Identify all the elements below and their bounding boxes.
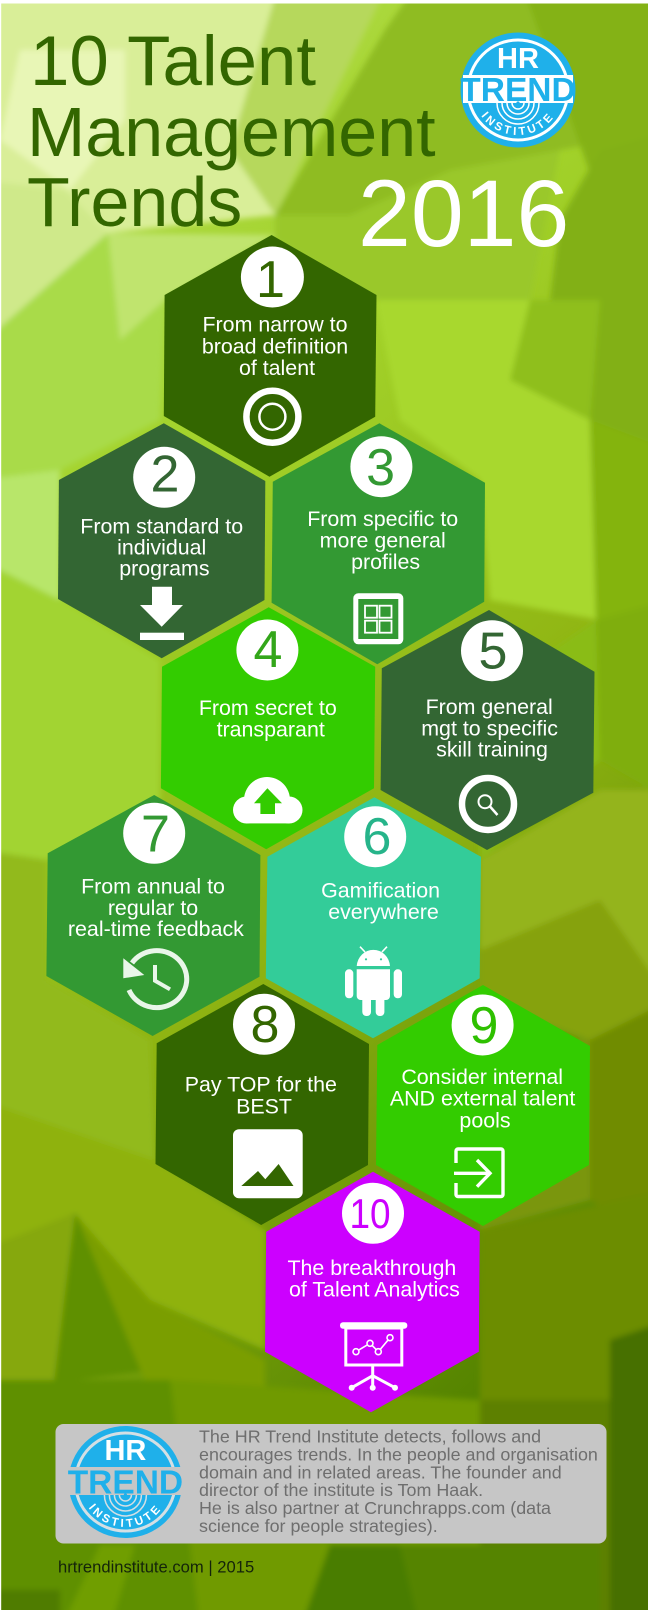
icon: picture [233, 1129, 303, 1198]
icon: target rings [246, 391, 298, 443]
hexagon 6: gamification: Gamification [321, 878, 440, 902]
hexagon 5: general to specific training [381, 610, 594, 850]
title: Trends [27, 163, 242, 241]
hexagon 3: specific to general: profiles [351, 550, 420, 574]
hexagon 9: internal and external pools: AND external talent [390, 1087, 575, 1111]
hexagon 2: standard to individual: programs [119, 557, 210, 581]
logo: HR Trend Institute: TREND [460, 72, 576, 109]
logo: panel HR Trend Institute: TREND [68, 1464, 183, 1502]
hexagon 1: narrow to broad talent: From narrow to [202, 313, 348, 337]
hexagon 7: annual to real-time feedback: 7 [141, 806, 170, 864]
hexagon 2: standard to individual [58, 423, 265, 658]
hexagon 2: standard to individual: 2 [151, 446, 179, 504]
about text: The HR Trend Institute detects, follows and [199, 1427, 541, 1447]
icon: presentation board [340, 1322, 407, 1391]
hexagon 4: secret to transparent: transparant [217, 718, 325, 742]
hexagon 3: specific to general: From specific to [307, 507, 458, 531]
hexagon 6: gamification: everywhere [328, 900, 439, 924]
panel: about the institute [56, 1424, 606, 1544]
icon: download arrow [140, 587, 184, 640]
hexagon 6: gamification: 6 [363, 808, 391, 866]
hexagon 10: talent analytics: The breakthrough [287, 1256, 456, 1280]
hexagon 9: internal and external pools: pools [459, 1108, 511, 1132]
hexagon 5: general to specific training: 5 [479, 622, 507, 680]
icon: magnifier [462, 778, 514, 830]
hexagon 6: gamification [266, 797, 481, 1038]
hexagon 3: specific to general: more general [320, 529, 446, 553]
logo: panel HR Trend Institute: INSTITUTE [88, 1503, 160, 1527]
logo: HR Trend Institute: INSTITUTE [482, 111, 553, 135]
icon: android robot [345, 947, 402, 1016]
year 2016: 2016 [358, 161, 569, 267]
about text: director of the institute is Tom Haak. [199, 1480, 483, 1500]
hexagon 9: internal and external pools: 9 [470, 997, 498, 1055]
footer credit: hrtrendinstitute.com | 2015 [58, 1558, 254, 1577]
title: Management [27, 93, 436, 171]
hexagon 9: internal and external pools [376, 985, 590, 1226]
logo: HR Trend Institute: HR [497, 43, 539, 75]
logo: panel HR Trend Institute: HR [104, 1435, 146, 1467]
hexagon 8: pay top for the best [156, 984, 369, 1225]
hexagon 7: annual to real-time feedback [46, 795, 260, 1036]
hexagon 2: standard to individual: individual [117, 535, 206, 559]
hexagon 4: secret to transparent: 4 [254, 621, 282, 679]
hexagon 5: general to specific training: From general [426, 695, 553, 719]
title [27, 22, 436, 241]
logo: panel HR Trend Institute [68, 1426, 183, 1538]
hexagon 2: standard to individual: From standard to [80, 514, 243, 538]
hexagon 10: talent analytics: 10 [349, 1191, 391, 1238]
hexagon 8: pay top for the best: Pay TOP for the [185, 1073, 337, 1097]
hexagon 7: annual to real-time feedback: regular to [108, 896, 198, 920]
hexagon 5: general to specific training: mgt to specific [421, 716, 558, 740]
hexagon 5: general to specific training: skill training [436, 738, 548, 762]
hexagon 8: pay top for the best: 8 [251, 996, 279, 1054]
hexagon 1: narrow to broad talent: 1 [256, 251, 285, 309]
about text: He is also partner at Crunchrapps.com (data [199, 1498, 551, 1518]
hexagon 1: narrow to broad talent [164, 235, 376, 477]
hexagon 7: annual to real-time feedback: From annual to [81, 874, 225, 898]
about text: science for people strategies). [199, 1516, 438, 1536]
icon: grid [353, 593, 403, 644]
about text: domain and in related areas. The founder and [199, 1462, 562, 1482]
hexagon 4: secret to transparent: From secret to [199, 696, 337, 720]
hexagon 1: narrow to broad talent: of talent [239, 356, 315, 380]
hexagon 3: specific to general [272, 423, 485, 664]
hexagon 8: pay top for the best: BEST [236, 1094, 292, 1118]
hexagon 4: secret to transparent [161, 607, 375, 849]
logo: HR Trend Institute [460, 32, 576, 148]
hexagon 10: talent analytics: of Talent Analytics [289, 1278, 460, 1302]
hexagon 3: specific to general: 3 [366, 439, 395, 497]
icon: cloud upload [233, 777, 302, 824]
hexagon 1: narrow to broad talent: broad definition [202, 334, 348, 358]
hexagon 7: annual to real-time feedback: real-time feedback [68, 917, 244, 941]
icon: exit arrow [454, 1149, 503, 1196]
icon: history clock [123, 951, 187, 1008]
hexagon 10: talent analytics [265, 1172, 480, 1412]
hexagon 9: internal and external pools: Consider internal [401, 1065, 563, 1089]
title: 10 Talent [30, 22, 316, 101]
about text: encourages trends. In the people and organisation [199, 1445, 598, 1465]
